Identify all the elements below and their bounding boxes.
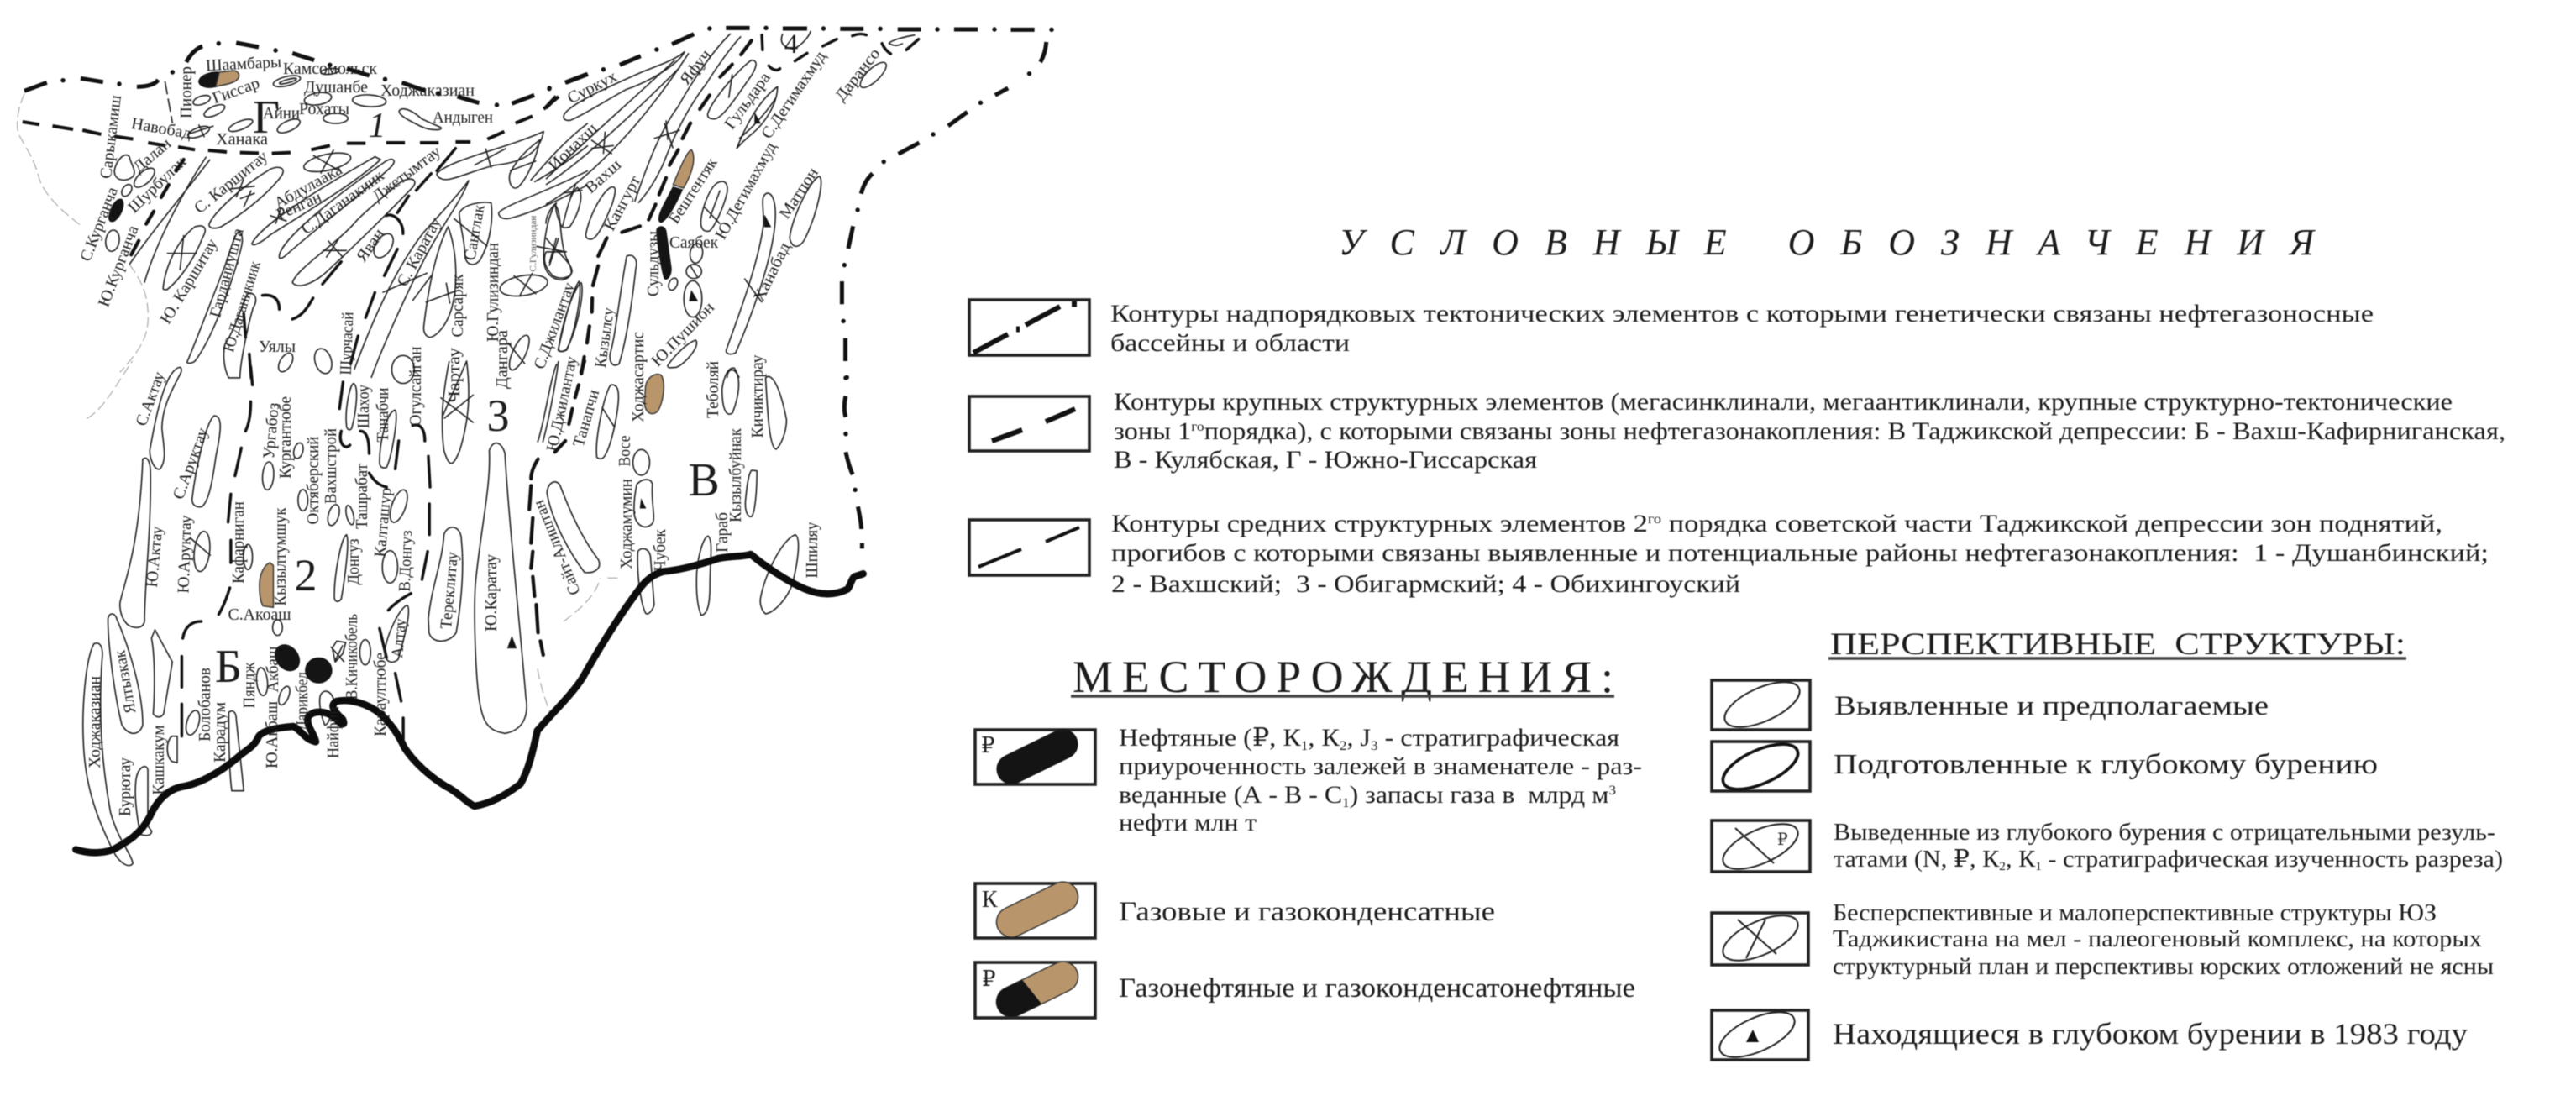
map structure names: С.Актау (133, 370, 169, 428)
field: Kyzyltumshuk gas (260, 563, 273, 607)
map structure names: Бештентяк (665, 155, 721, 227)
map structure names: Донгуз (345, 538, 363, 584)
legend item: large structural contours: Контуры крупных структурных элементов (мегасинклинали, мегаантиклинали, крупные структурно-тектонические (1114, 388, 2453, 416)
map structure names: Чубек (652, 528, 669, 571)
legend item: medium structural contours: 2 - Вахшский; 3 - Обигармский; 4 - Обихингоуский (1111, 570, 1740, 598)
legend item: prepared for deep drilling (1712, 735, 2378, 799)
map structure names: Танапчи (570, 388, 603, 449)
map structure names: Ходжаказиан (380, 82, 475, 100)
map structure names: Ю.Пушион (648, 299, 718, 370)
map region letters and numbers (215, 29, 798, 693)
map: oil and gas structures of the Tajik depression (18, 28, 1052, 866)
legend item: supra-order tectonic contours: Контуры надпорядковых тектонических элементов с которыми генетически связаны нефтегазоносные (1110, 300, 2374, 328)
map north-east structures and boundaries (544, 28, 1052, 378)
map structure names: Гульдара (721, 69, 774, 133)
map structure names: Вахш (582, 156, 625, 197)
map structure names: Карадум (212, 702, 229, 763)
map structure names: Ионахш (545, 120, 601, 175)
map region letters and numbers: 2 (294, 550, 317, 600)
map structure names: Шурбулак (125, 153, 190, 217)
map structure names (77, 45, 884, 816)
legend item: oil deposits: Нефтяные (₽, К (1119, 724, 1288, 752)
map structure names: Бурютау (117, 757, 134, 816)
legend item: in deep drilling in 1983 (1712, 1003, 2468, 1067)
legend item: unpromising structures (1712, 899, 2494, 980)
legend item: oil deposits: нефти млн т (1119, 809, 1257, 836)
legend item: in deep drilling in 1983: Находящиеся в глубоком бурении в 1983 году (1833, 1017, 2468, 1051)
map structure names: Ташрабат (354, 464, 371, 529)
map structure names: Ю.Акбаш (264, 701, 281, 768)
map structure names: Ю.Каратау (483, 554, 501, 632)
map structure names: Сульдузы (645, 231, 663, 296)
map structure names: Ургабоз (260, 401, 283, 459)
icon: crossed oval with letter: ₽ (1777, 831, 1788, 849)
map structure names: С. Каршитау (191, 148, 271, 218)
map structure names: С.Акоаш (228, 606, 291, 624)
map structure names: Вахшстрой (323, 428, 340, 504)
map structure names: Ю.Дегимахмуд (712, 139, 780, 243)
map structure names: Караултюбе (372, 653, 390, 736)
state border east section (538, 554, 863, 731)
map region letters and numbers: Г (253, 92, 280, 144)
legend item: oil deposits: ) запасы газа в млрд м (1350, 781, 1608, 809)
map structure names: С.Курганча (77, 185, 122, 264)
legend item: medium structural contours: го (1648, 512, 1661, 527)
map structure names: Тереклитау (438, 551, 462, 630)
map structure names: Ю. Каршитау (157, 236, 222, 328)
legend item: medium structural contours: порядка советской части Таджикской депрессии зон поднятий, (1661, 510, 2442, 537)
map structure names: Ю.Аруктау (175, 515, 196, 594)
field: Beshtentyak gas-oil (658, 149, 694, 223)
legend item: oil deposits: 1 (1301, 739, 1308, 753)
map structure names: Танабчи (375, 388, 392, 442)
icon: oval with triangle (1712, 1003, 1808, 1067)
map structure names: Ходжаказиан (87, 676, 104, 768)
icon: thin dashed line (969, 520, 1089, 575)
legend item: medium structural contours: прогибов с которыми связаны выявленные и потенциальные районы нефтегазонакопления: 1 - Душанбинский; (1111, 539, 2489, 567)
legend item: gas deposits (975, 877, 1495, 942)
map region letters and numbers: 3 (487, 391, 509, 441)
map structure names: Саябек (669, 234, 719, 252)
map structure names: Ялтызкак (111, 648, 139, 715)
map structure names: Яфуч (677, 46, 715, 88)
legend item: oil deposits: приуроченность залежей в знаменателе - раз- (1119, 752, 1642, 780)
map structure names: Пяндж (241, 662, 259, 709)
map structure names: Дангара (494, 330, 512, 389)
map south-west structures and boundaries (87, 361, 543, 739)
legend item: withdrawn from drilling (1712, 815, 2503, 878)
map structure names: В.Кичикобель (344, 614, 361, 700)
map structure names: Найфин (325, 706, 343, 758)
legend item: oil deposits: 3 (1608, 784, 1616, 798)
legend item: identified and assumed: Выявленные и предполагаемые (1834, 691, 2269, 721)
map structure names: Сайт-Алиштан (530, 497, 585, 597)
legend item: identified and assumed (1712, 673, 2269, 736)
legend item: unpromising structures: Таджикистана на мел - палеогеновый комплекс, на которых (1833, 925, 2483, 952)
icon: crossed oval with letter (1712, 815, 1810, 878)
map structure names: Кызылсу (592, 307, 618, 369)
map region letters and numbers: В (688, 454, 720, 506)
map structure names: В.Донгуз (396, 530, 416, 592)
map structure names: Джетымтау (370, 143, 444, 206)
icon: thin oval (1712, 673, 1810, 736)
legend item: large structural contours: В - Кулябская, Г - Южно-Гиссарская (1114, 446, 1537, 474)
map structure names: Камсомольск (283, 60, 378, 78)
map structure names: Ходжамумин (618, 479, 636, 569)
map structure names: Дарансо (832, 45, 884, 105)
map structure names: Ю.Джилантау (543, 354, 581, 453)
state border west section (76, 700, 538, 852)
icon: brown capsule: К (982, 887, 998, 913)
map structure names: Айни (263, 105, 300, 123)
map structure names: Сарыкамиш (97, 94, 125, 180)
icon: thick dashed line (969, 396, 1089, 451)
legend item: prepared for deep drilling: Подготовленные к глубокому бурению (1834, 749, 2378, 780)
map structure names: Суркух (564, 68, 620, 107)
map structure names: Алтау (389, 617, 410, 658)
icon: brown capsule (975, 877, 1095, 942)
map structure names: Калташур (371, 487, 396, 558)
map structure names: Гиссар (210, 75, 262, 107)
map structure names: Акбаш (265, 647, 282, 692)
legend item: oil deposits: веданные (А - В - С (1119, 781, 1329, 809)
legend item: supra-order tectonic contours: бассейны и области (1110, 329, 1350, 357)
icon: dash-dot line (969, 300, 1089, 355)
heading: prospective structures: ПЕРСПЕКТИВНЫЕ СТРУКТУРЫ: (1830, 627, 2405, 662)
map structure names: Рохаты (299, 101, 349, 118)
map structure names: Яван (353, 226, 388, 265)
legend item: large structural contours (969, 388, 2505, 474)
legend item: large structural contours: зоны 1 (1114, 417, 1185, 445)
map structure names: Ходжасартис (630, 332, 648, 422)
field: Shaambary gas-oil (199, 71, 239, 87)
map structure names: Ю.Даганикиик (220, 259, 265, 354)
map structure names: Ренган (274, 188, 324, 223)
map north-west structures and boundaries (18, 43, 588, 384)
map structure names: Шаамбары (206, 54, 282, 75)
legend item: oil deposits: 3 (1371, 739, 1378, 753)
legend item: withdrawn from drilling: татами (N, ₽, К (1834, 846, 1993, 873)
legend item: unpromising structures: структурный план и перспективы юрских отложений не ясны (1833, 953, 2494, 980)
legend item: gas deposits: Газовые и газоконденсатные (1119, 897, 1495, 927)
map south structures and state border (76, 605, 538, 866)
field: Khodzhasartis gas (644, 375, 664, 414)
map structure names: Дарикбел (294, 672, 312, 731)
legend item: oil deposits: , К (1308, 724, 1340, 752)
icon: half black half brown capsule: ₽ (982, 967, 996, 991)
legend item: oil deposits (975, 724, 1642, 836)
map structure names: Ю.Гулизиндан (485, 243, 502, 342)
map structure names: Болобанов (197, 668, 214, 742)
map region letters and numbers: 1 (368, 107, 386, 145)
map structure names: Душанбе (304, 79, 368, 97)
icon: bold oval (1712, 735, 1810, 799)
legend item: unpromising structures: Бесперспективные и малоперспективные структуры ЮЗ (1833, 899, 2437, 926)
map structure names: Шпиляу (804, 522, 821, 578)
map structure names: Андыген (433, 109, 493, 127)
legend item: large structural contours: порядка), с которыми связаны зоны нефтегазонакопления: В Таджикской депрессии: Б - Вахш-Кафирниганская, (1204, 417, 2505, 445)
legend item: large structural contours: го (1191, 420, 1204, 434)
map structure names: Гараб (714, 512, 732, 553)
map structure names: Ханабад (750, 239, 795, 305)
map structure names: С.Гулизиндан (528, 215, 538, 272)
map structure names: С.Джилантау (531, 280, 579, 372)
map structure names: Шахоу (355, 385, 373, 428)
icon: half black half brown capsule (975, 957, 1095, 1022)
legend item: withdrawn from drilling: - стратиграфическая изученность разреза) (2042, 846, 2503, 873)
legend item: medium structural contours: Контуры средних структурных элементов 2 (1111, 510, 1578, 537)
icon: double crossed oval (1712, 906, 1808, 970)
icon: black capsule (975, 724, 1095, 789)
map structure names: Ханака (216, 131, 268, 149)
map structure names: Кичиктирау (749, 354, 767, 438)
map south-east structures and boundaries (538, 361, 863, 731)
map structure names: Восе (616, 435, 634, 467)
map structure names: С.Дегимахмуд (758, 48, 830, 142)
map structure names: Октяберский (305, 437, 323, 524)
map structure names: Навобад (130, 115, 192, 143)
map structure names: Пионер (178, 66, 196, 118)
map structure names: Кашкакум (150, 726, 168, 794)
heading: deposits: МЕСТОРОЖДЕНИЯ: (1073, 652, 1613, 702)
legend item: medium structural contours (969, 510, 2489, 598)
icon: black capsule: ₽ (981, 733, 995, 757)
legend item: withdrawn from drilling: 1 (2035, 860, 2042, 873)
map structure names: Матпон (776, 165, 822, 223)
legend item: supra-order tectonic contours (969, 300, 2374, 357)
map structure names: Абдулаака (271, 161, 346, 212)
map structure names: Кургантюбе (277, 396, 295, 479)
legend title: УСЛОВНЫЕ ОБОЗНАЧЕНИЯ (1339, 222, 2316, 263)
oil fields near Akbash (270, 642, 332, 683)
map region letters and numbers: 4 (784, 29, 798, 60)
legend item: oil deposits: 1 (1342, 796, 1350, 810)
map structure names: Кангурт (601, 173, 645, 234)
map structure names: Теболяй (705, 361, 722, 418)
legend item: oil deposits: , J (1346, 724, 1371, 752)
legend item: withdrawn from drilling: Выведенные из глубокого бурения с отрицательными резуль- (1834, 819, 2495, 846)
legend item: withdrawn from drilling: 2 (1999, 860, 2006, 873)
map structure names: Кызылтумшук (272, 507, 290, 606)
map structure names: Уялы (259, 338, 296, 356)
map structure names: Шурчасай (338, 312, 357, 375)
map structure names: Гарданиушта (207, 226, 248, 319)
map structure names: Ю.Курганча (95, 223, 143, 310)
map structure names: Далан (130, 135, 175, 176)
legend item: gas-oil deposits (975, 957, 1635, 1022)
legend item: oil deposits: 2 (1340, 739, 1346, 753)
map structure names: Кафарниган (230, 501, 248, 584)
map region letters and numbers: Б (215, 641, 242, 693)
map structure names: Чартау (446, 348, 464, 403)
map structure names: С. Каратау (394, 214, 445, 290)
map structure names: Сарсаряк (449, 274, 467, 338)
map structure names: С.Аруктау (170, 426, 212, 502)
map structure names: Ю.Актау (144, 526, 166, 588)
map structure names: С.Даганакиик (298, 167, 388, 238)
map structure names: Кызылбуйнак (727, 427, 745, 522)
map structure names: Санглак (461, 203, 489, 262)
legend item: gas-oil deposits: Газонефтяные и газоконденсатонефтяные (1119, 973, 1635, 1004)
legend item: oil deposits: - стратиграфическая (1378, 724, 1619, 752)
map structure names: Огулсайган (407, 346, 425, 427)
legend item: withdrawn from drilling: , К (2006, 846, 2036, 873)
